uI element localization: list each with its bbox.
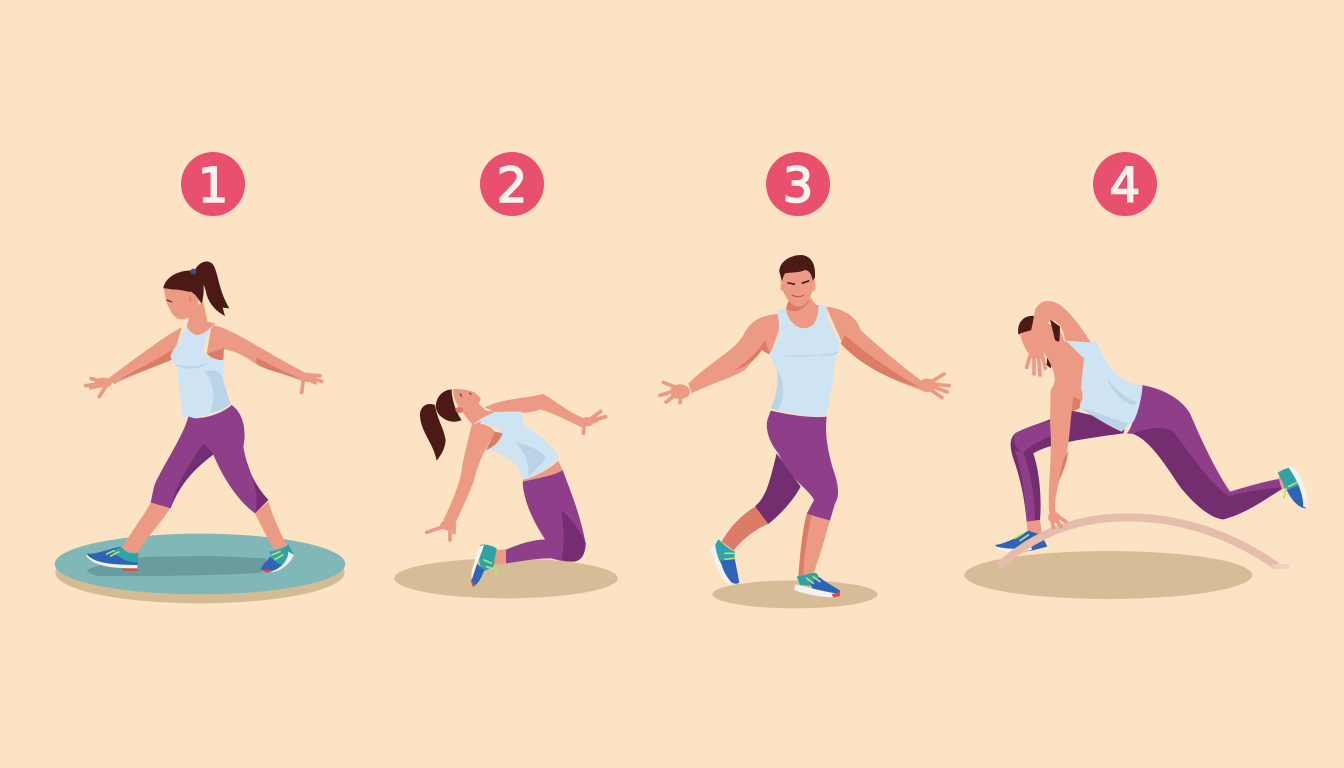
neck (460, 403, 495, 427)
right arm (826, 307, 949, 398)
tank top (768, 304, 840, 417)
ponytail (194, 262, 229, 316)
step badge 3 (766, 152, 830, 216)
step badge 1 (181, 152, 245, 216)
raised arm around head (1027, 301, 1091, 375)
neck shadow (786, 298, 809, 311)
lower legs (722, 507, 830, 577)
ponytail (420, 404, 446, 461)
front shoe (794, 573, 840, 598)
left shoe (87, 547, 138, 571)
step badge 3: 3 (783, 158, 813, 214)
head (163, 269, 204, 319)
neck and chest (185, 302, 216, 337)
bare midriff (523, 461, 563, 482)
lower legs (122, 502, 287, 554)
right shoe (261, 544, 294, 573)
step badge 2: 2 (497, 158, 527, 214)
tank top (171, 323, 231, 418)
shoe (471, 545, 497, 587)
back leg pants (151, 417, 227, 508)
ankle (492, 549, 506, 565)
figure 4: woman lunging over curved board (964, 301, 1308, 599)
step badge 4: 4 (1110, 158, 1140, 214)
front leg pants (1011, 409, 1127, 522)
neck and chest (778, 293, 820, 329)
far arm (485, 394, 606, 433)
step badge 1: 1 (198, 158, 228, 214)
ground shadow (712, 580, 878, 608)
front shoe (995, 531, 1047, 552)
hair and face (1018, 316, 1065, 368)
front leg pants (767, 411, 838, 521)
ground shadow (964, 551, 1252, 599)
head (779, 255, 816, 307)
neck and back skin (1040, 341, 1084, 408)
front leg pants (188, 405, 268, 513)
head (436, 389, 481, 422)
teal balance disc (55, 534, 345, 603)
back shoe (710, 539, 739, 584)
tank top (472, 412, 560, 480)
front ankle (1027, 520, 1042, 537)
near arm (427, 424, 503, 540)
supporting arm (1048, 379, 1083, 528)
left arm (86, 327, 182, 397)
ground shadow (394, 558, 618, 598)
left arm (660, 314, 783, 403)
figure 2: woman kneeling and arching back (394, 389, 618, 598)
tank top (1065, 340, 1143, 432)
figure 1: woman walking on balance disc (55, 262, 345, 603)
back leg pants (755, 453, 801, 524)
back leg pants (1127, 385, 1283, 519)
curved balance board (998, 517, 1289, 569)
step badge 2 (480, 152, 544, 216)
step badge 4 (1093, 152, 1157, 216)
figure 3: man balancing on one leg (660, 255, 949, 608)
pants (505, 470, 586, 563)
back ankle and shoe (1278, 467, 1308, 508)
right arm (207, 325, 322, 393)
